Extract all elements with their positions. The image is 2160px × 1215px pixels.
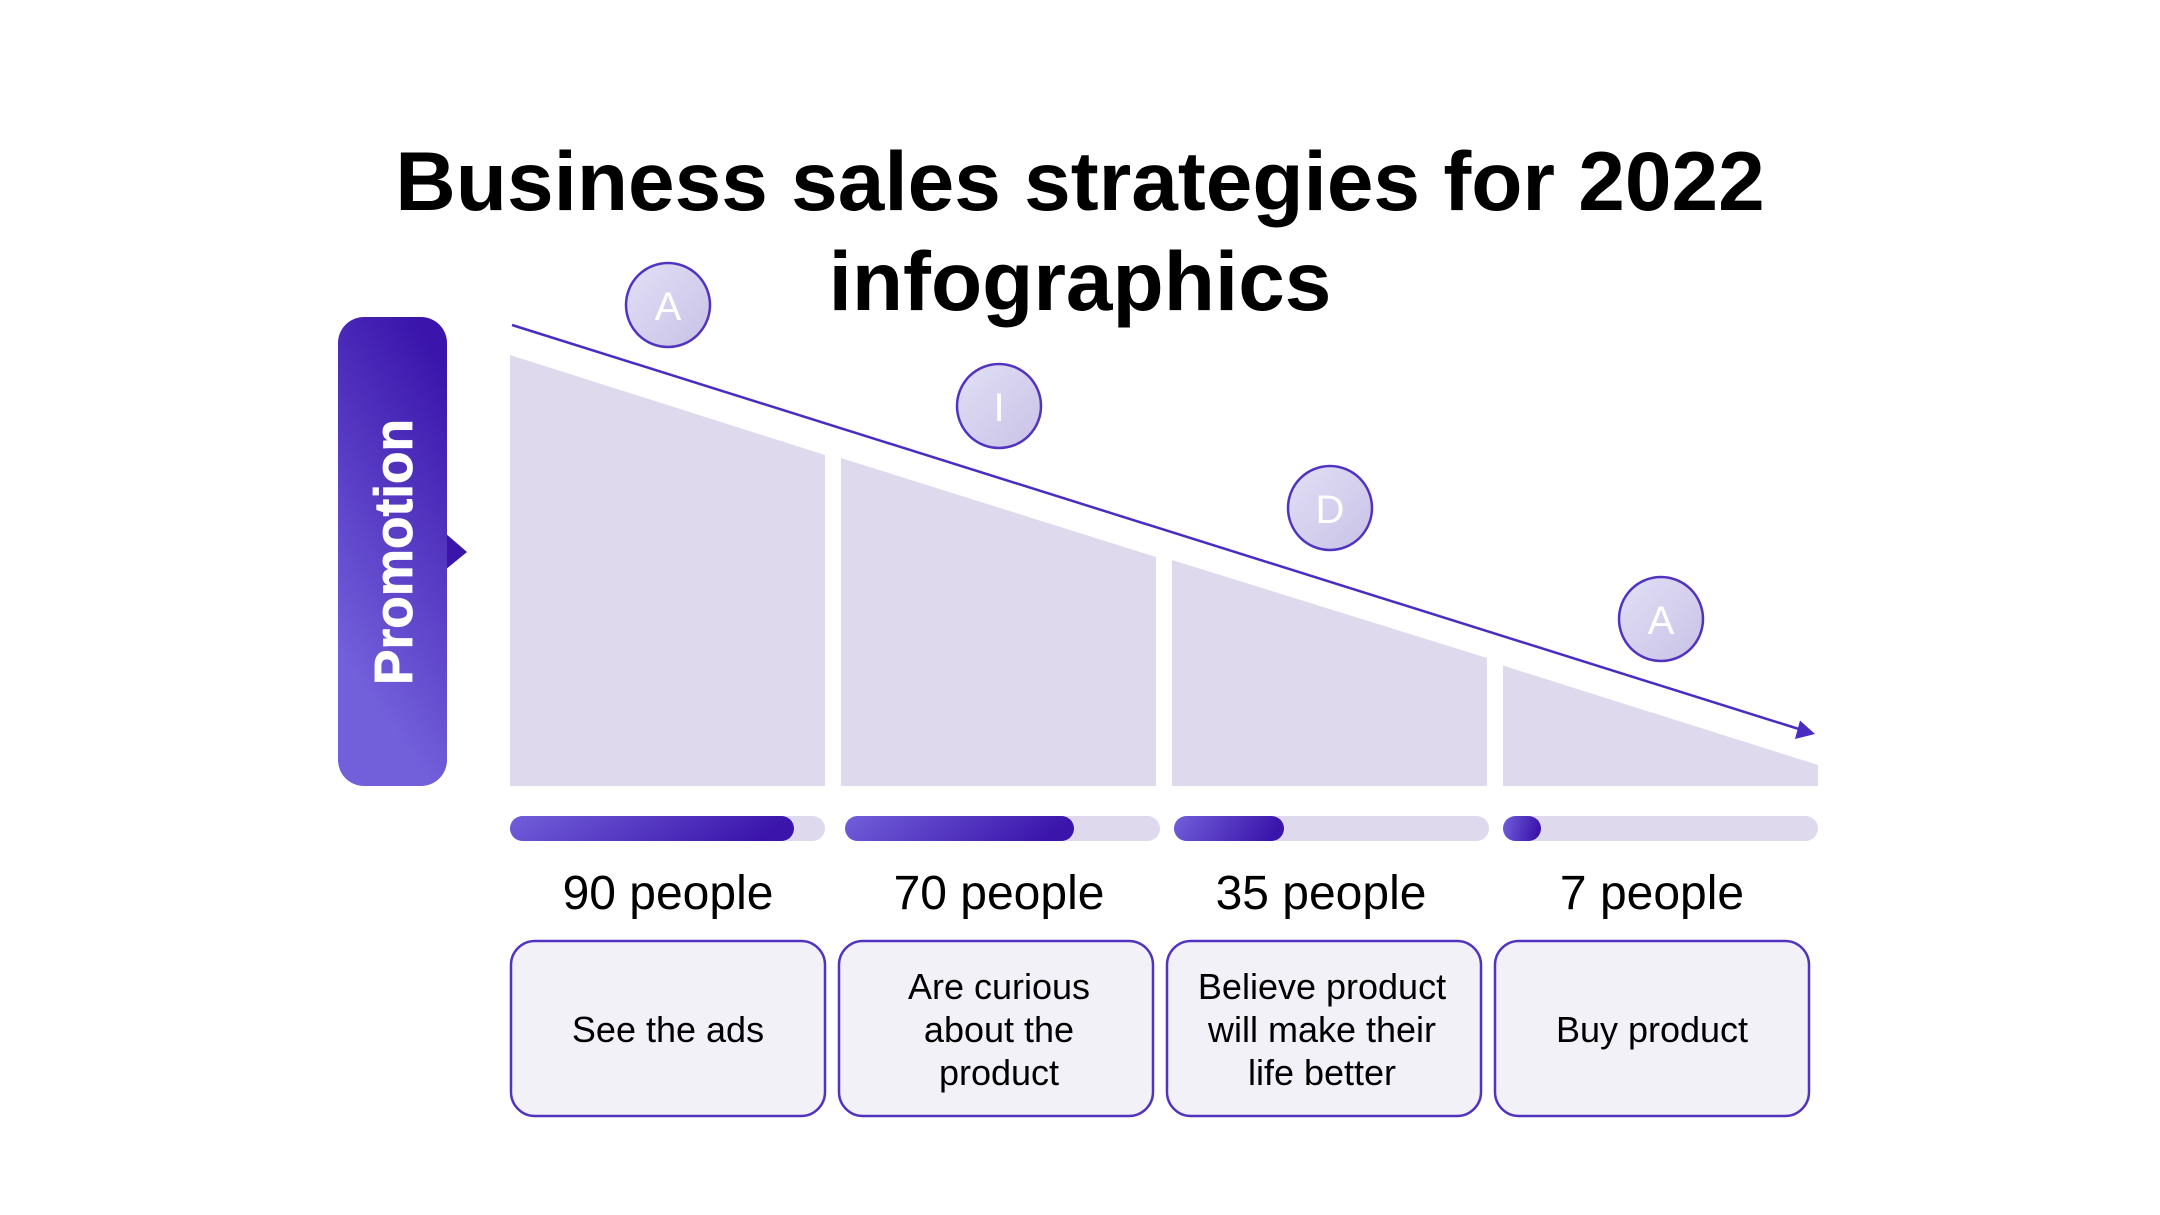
icon: circle A second: [1619, 577, 1703, 661]
icon: circle D: D: [1316, 488, 1344, 532]
title: Business sales strategies for 2022: [395, 134, 1765, 228]
panel: are curious about the product: [839, 941, 1153, 1116]
panel: interest area: [841, 458, 1156, 786]
arrow: declining trend line: [512, 325, 1815, 739]
progress bar: 7 people: [1503, 816, 1818, 841]
icon: circle A: [626, 263, 710, 347]
panel: believe product will make their life better: life better: [1248, 1052, 1396, 1093]
title: infographics: [829, 234, 1331, 328]
label: 70 people: 70 people: [894, 867, 1104, 920]
progress bar: 70 people: [845, 816, 1160, 841]
panel: desire area: [1172, 560, 1487, 786]
panel: buy product: Buy product: [1556, 1009, 1748, 1050]
icon: circle I: [957, 364, 1041, 448]
icon: circle I: I: [993, 386, 1005, 430]
panel: believe product will make their life better: Believe product: [1198, 966, 1446, 1007]
panel: see the ads: [511, 941, 825, 1116]
promotion text: Promotion: [364, 419, 424, 685]
icon: circle D: [1288, 466, 1372, 550]
icon: circle A: A: [655, 285, 682, 329]
chart: funnel decline panels: [510, 355, 1818, 786]
icon: promotion pointer: [445, 533, 467, 570]
panel: attention area: [510, 355, 825, 786]
label: 35 people: 35 people: [1216, 867, 1426, 920]
progress bar: 35 people: [1174, 816, 1489, 841]
panel: buy product: [1495, 941, 1809, 1116]
progress bar: 90 people: [510, 816, 825, 841]
panel: see the ads: See the ads: [572, 1009, 764, 1050]
panel: promotion label: [338, 317, 467, 786]
panel: believe product will make their life better: [1167, 941, 1481, 1116]
panel: action area: [1503, 666, 1818, 786]
promotion box: [338, 317, 447, 786]
panel: believe product will make their life better: will make their: [1207, 1009, 1436, 1050]
icon: circle A second: A: [1648, 599, 1675, 643]
panel: are curious about the product: product: [939, 1052, 1059, 1093]
label: 7 people: 7 people: [1560, 867, 1744, 920]
panel: are curious about the product: Are curious: [908, 966, 1090, 1007]
label: 90 people: 90 people: [563, 867, 773, 920]
panel: are curious about the product: about the: [924, 1009, 1074, 1050]
